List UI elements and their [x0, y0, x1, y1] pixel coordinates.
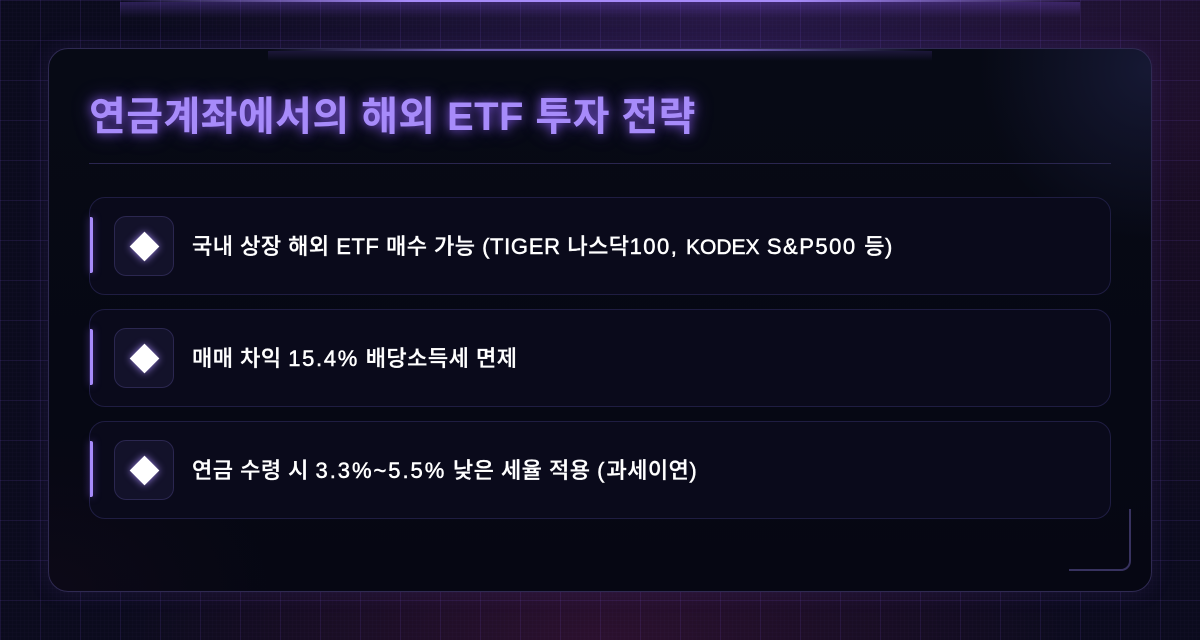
icon: diamond 2	[114, 328, 174, 388]
corner bracket	[1069, 509, 1131, 571]
panel: main card	[48, 48, 1152, 592]
top bar	[120, 0, 1080, 2]
card top highlight	[268, 49, 932, 51]
title: 연금계좌에서의 해외 ETF 투자 전략	[89, 95, 696, 139]
title divider	[89, 163, 1111, 164]
icon: diamond 3	[114, 440, 174, 500]
card top glow	[268, 51, 932, 61]
item text 3: 연금 수령 시 3.3%~5.5% 낮은 세율 적용 (과세이연)	[192, 458, 699, 483]
item text 1: 국내 상장 해외 ETF 매수 가능 (TIGER 나스닥100, KODEX S&P500 등)	[192, 234, 893, 259]
icon: diamond 1	[114, 216, 174, 276]
list item 3	[89, 421, 1111, 519]
top glow	[120, 2, 1080, 18]
list item 1	[89, 197, 1111, 295]
list item 2	[89, 309, 1111, 407]
item text 2: 매매 차익 15.4% 배당소득세 면제	[192, 346, 517, 371]
